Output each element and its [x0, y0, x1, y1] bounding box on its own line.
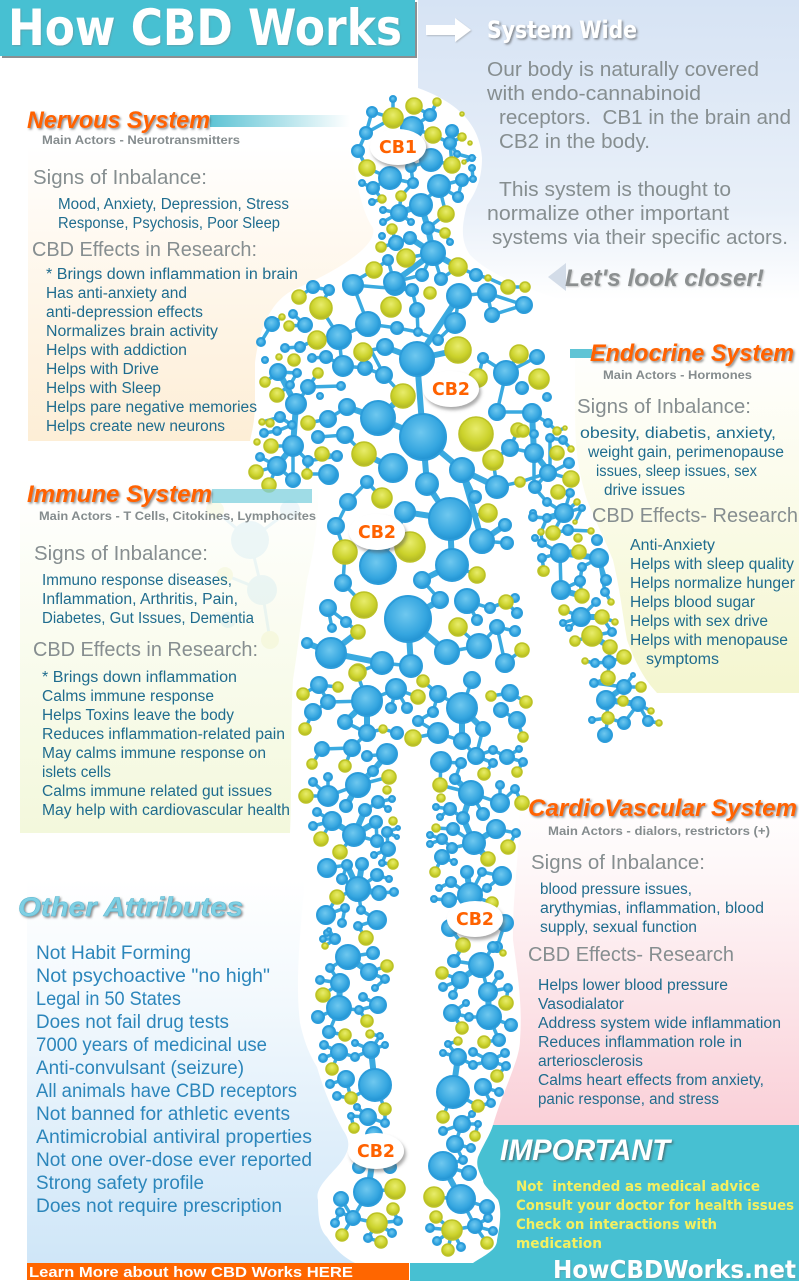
panel: immune system text: Inflammation, Arthritis, Pain,	[42, 591, 238, 608]
panel: cardiovascular system text: Vasodialator	[538, 996, 624, 1013]
panel: other attributes text: Not Habit Forming	[36, 943, 191, 964]
panel: immune system text: Reduces inflammation-related pain	[42, 726, 285, 743]
panel: important	[410, 1125, 799, 1281]
panel: endocrine system text: CBD Effects- Research	[592, 504, 798, 527]
label: CB1	[370, 129, 426, 165]
panel: endocrine system text: Helps with menopause	[630, 632, 788, 649]
panel: endocrine system background	[575, 340, 799, 693]
panel: other attributes text: Not banned for athletic events	[36, 1104, 290, 1125]
panel: nervous system text: Helps create new neurons	[46, 418, 225, 435]
panel: immune system text: Main Actors - T Cells, Citokines, Lymphocites	[39, 511, 316, 523]
panel: cardiovascular system text: Calms heart effects from anxiety,	[538, 1072, 764, 1089]
panel: other attributes text: Antimicrobial antiviral properties	[36, 1127, 312, 1148]
panel: endocrine system text: Main Actors - Hormones	[603, 370, 752, 382]
heading: other attributes: Other Attributes	[18, 892, 243, 922]
panel: immune system text: * Brings down inflammation	[42, 669, 237, 686]
panel: other attributes text: All animals have CBD receptors	[36, 1081, 297, 1102]
panel: endocrine system text: symptoms	[646, 651, 719, 668]
panel: cardiovascular system text: supply, sexual function	[540, 919, 697, 936]
heading: endocrine system: Endocrine System	[590, 340, 794, 367]
panel: cardiovascular system text: panic response, and stress	[538, 1091, 719, 1108]
text: system wide description	[486, 58, 791, 249]
panel: cardiovascular system text: Reduces inflammation role in	[538, 1034, 742, 1051]
panel: endocrine system text	[570, 340, 798, 668]
panel: other attributes background	[27, 880, 355, 1263]
panel: immune system text	[27, 481, 316, 819]
human body made of molecules	[249, 96, 662, 1256]
panel: nervous system text: Main Actors - Neurotransmitters	[42, 135, 240, 147]
panel: other attributes text: Not one over-dose ever reported	[36, 1150, 312, 1171]
faint molecule watermark in immune panel	[206, 500, 300, 649]
label: CB2 chest	[423, 371, 479, 407]
heading: nervous system: Nervous System	[27, 107, 210, 134]
panel: other attributes text	[18, 892, 312, 1217]
panel: cardiovascular system text	[528, 795, 797, 1108]
panel: other attributes text: Strong safety profile	[36, 1173, 204, 1194]
text: system wide description: CB2 in the body.	[499, 130, 650, 153]
panel: other attributes text: 7000 years of medicinal use	[36, 1035, 267, 1056]
text: system wide description: Our body is naturally covered	[487, 58, 759, 81]
panel: endocrine system text: Signs of Inbalance:	[577, 395, 751, 418]
panel: other attributes text: Does not fail drug tests	[36, 1012, 229, 1033]
panel: immune system text: May help with cardiovascular health	[42, 802, 290, 819]
panel: nervous system text: Helps with addiction	[46, 342, 187, 359]
panel: other attributes text: Does not require prescription	[36, 1196, 282, 1217]
panel: cardiovascular system text: Helps lower blood pressure	[538, 977, 728, 994]
panel: endocrine system text: Helps normalize hunger	[630, 575, 795, 592]
panel: nervous system background	[28, 146, 373, 441]
panel: immune system background	[20, 478, 318, 833]
label: CB2 thigh: CB2	[456, 909, 494, 930]
panel: cardiovascular system text: Signs of Inbalance:	[531, 851, 705, 874]
text: system wide description: normalize other important	[487, 202, 729, 225]
heading: immune system: Immune System	[27, 481, 212, 508]
label: CB2 chest: CB2	[432, 379, 470, 400]
panel: nervous system text: Mood, Anxiety, Depression, Stress	[58, 196, 289, 213]
panel: endocrine system text: obesity, diabetis, anxiety,	[580, 425, 776, 442]
label: CB2 ankle	[348, 1133, 404, 1169]
title banner: How CBD Works	[8, 0, 402, 57]
panel: nervous system text: Response, Psychosis, Poor Sleep	[58, 215, 280, 232]
panel: endocrine system text: weight gain, perimenopause	[587, 444, 784, 461]
text: system wide description: with endo-cannabinoid	[486, 82, 701, 105]
panel: cardiovascular system text: arythymias, inflammation, blood	[540, 900, 764, 917]
text: system wide description: systems via their specific actors.	[492, 226, 788, 249]
panel: important text: Check on interactions with	[516, 1217, 717, 1233]
text: system wide description: receptors. CB1 in the brain and	[499, 106, 791, 129]
label: CB2 ankle: CB2	[357, 1141, 395, 1162]
arrow to system wide	[426, 18, 471, 42]
panel: system wide background	[418, 0, 799, 300]
panel: immune system text: Signs of Inbalance:	[34, 542, 208, 565]
heading: cardiovascular system: CardioVascular System	[528, 795, 797, 822]
panel: immune system text: May calms immune response on	[42, 745, 266, 762]
panel: nervous system text: Signs of Inbalance:	[33, 166, 207, 189]
panel: important text: medication	[516, 1236, 602, 1252]
panel: nervous system text: CBD Effects in Research:	[32, 238, 257, 261]
panel: immune system text: Immuno response diseases,	[42, 572, 232, 589]
panel: cardiovascular system text: Main Actors - dialors, restrictors (+)	[548, 826, 770, 838]
panel: immune system text: Helps Toxins leave the body	[42, 707, 234, 724]
panel: endocrine system text: issues, sleep issues, sex	[596, 463, 757, 480]
label: CB2 abdomen: CB2	[358, 522, 396, 543]
panel: important text	[500, 1134, 794, 1252]
panel: immune system text: CBD Effects in Research:	[33, 638, 258, 661]
panel: nervous system text: Has anti-anxiety and	[46, 285, 187, 302]
callout: let's look closer: Let's look closer!	[565, 265, 764, 292]
panel: immune system text: Diabetes, Gut Issues, Dementia	[42, 610, 254, 627]
panel: nervous system text: * Brings down inflammation in brain	[46, 266, 298, 283]
panel: other attributes text: Anti-convulsant (seizure)	[36, 1058, 244, 1079]
heading: important: IMPORTANT	[500, 1134, 673, 1167]
panel: other attributes text: Not psychoactive "no high"	[36, 966, 270, 987]
panel: immune system text: Calms immune related gut issues	[42, 783, 272, 800]
panel: cardiovascular system text: CBD Effects- Research	[528, 943, 734, 966]
panel: nervous system text	[27, 107, 350, 435]
panel: cardiovascular system text: arteriosclerosis	[538, 1053, 643, 1070]
label: CB2 abdomen	[349, 514, 405, 550]
panel: cardiovascular system background	[493, 800, 799, 1125]
panel: nervous system text: Helps pare negative memories	[46, 399, 257, 416]
text: system wide description: This system is thought to	[499, 178, 731, 201]
panel: endocrine system text: Anti-Anxiety	[630, 537, 715, 554]
heading: system wide: System Wide	[487, 16, 637, 44]
label: CB2 thigh	[447, 901, 503, 937]
panel: nervous system text: Normalizes brain activity	[46, 323, 218, 340]
panel: immune system text: islets cells	[42, 764, 111, 781]
panel: endocrine system text: drive issues	[604, 482, 685, 499]
panel: nervous system text: anti-depression effects	[46, 304, 203, 321]
panel: cardiovascular system text: blood pressure issues,	[540, 881, 692, 898]
panel: endocrine system text: Helps with sex drive	[630, 613, 768, 630]
footer: learn more bar: Learn More about how CBD Works HERE	[29, 1264, 353, 1281]
panel: nervous system text: Helps with Drive	[46, 361, 159, 378]
panel: endocrine system text: Helps with sleep quality	[630, 556, 794, 573]
panel: nervous system text: Helps with Sleep	[46, 380, 161, 397]
label: CB1: CB1	[379, 137, 417, 158]
panel: endocrine system text: Helps blood sugar	[630, 594, 755, 611]
panel: important text: Not intended as medical advice	[516, 1179, 760, 1195]
panel: other attributes text: Legal in 50 States	[36, 989, 181, 1010]
panel: immune system text: Calms immune response	[42, 688, 214, 705]
panel: cardiovascular system text: Address system wide inflammation	[538, 1015, 781, 1032]
